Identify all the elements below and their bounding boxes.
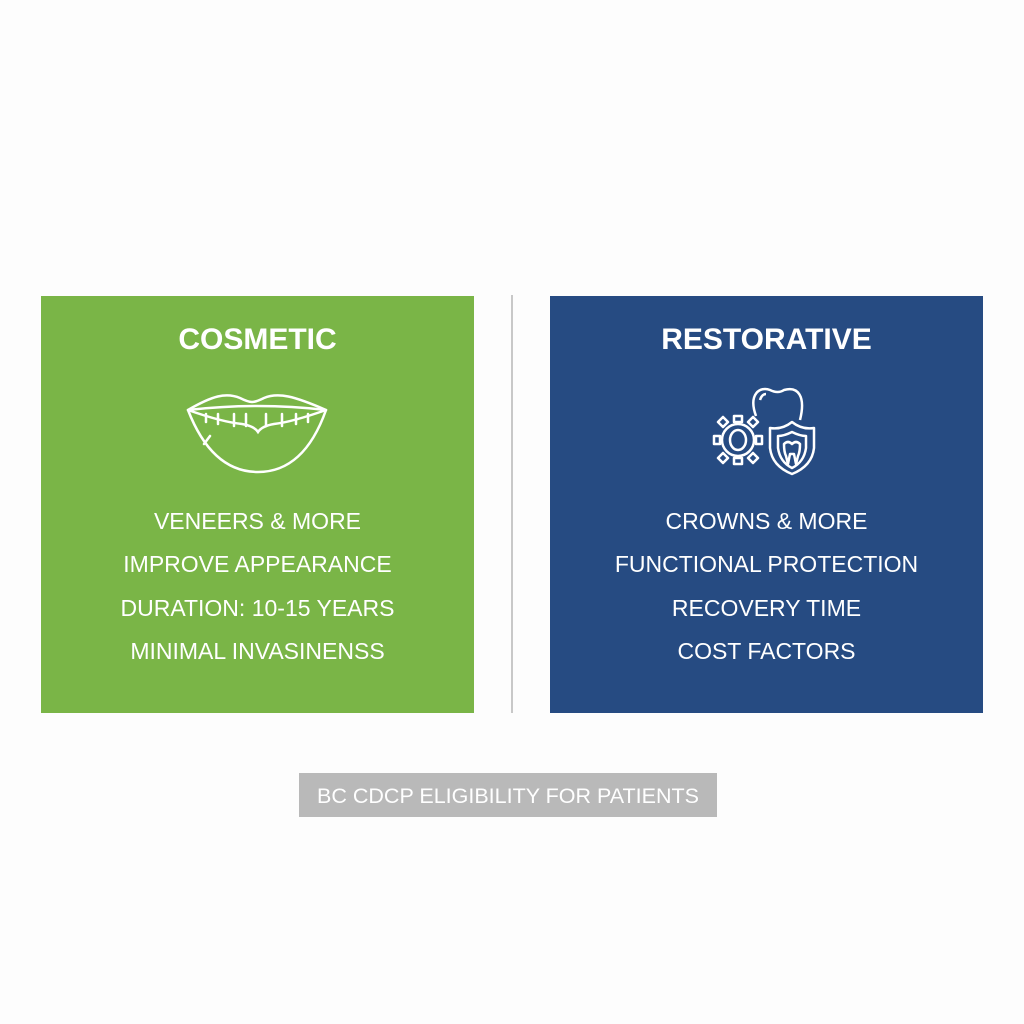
icon: smiling lips <box>186 394 328 474</box>
panel: restorative: COST FACTORS <box>677 638 856 664</box>
text: cosmetic points <box>121 508 394 664</box>
heading: restorative: RESTORATIVE <box>661 323 872 356</box>
panel: restorative <box>550 296 983 713</box>
footer label <box>299 773 717 817</box>
panel: restorative: CROWNS & MORE <box>666 508 867 534</box>
panel: cosmetic: VENEERS & MORE <box>154 508 361 534</box>
panel: cosmetic <box>41 296 474 713</box>
panel: cosmetic: DURATION: 10-15 YEARS <box>121 595 394 621</box>
heading: cosmetic: COSMETIC <box>178 323 337 356</box>
panel: cosmetic: MINIMAL INVASINENSS <box>130 638 385 664</box>
panel: restorative: RECOVERY TIME <box>672 595 861 621</box>
divider <box>511 295 513 713</box>
panel: cosmetic: IMPROVE APPEARANCE <box>123 551 392 577</box>
footer label: BC CDCP ELIGIBILITY FOR PATIENTS <box>317 784 699 808</box>
panel: restorative: FUNCTIONAL PROTECTION <box>615 551 918 577</box>
icon: gear, tooth and shield <box>712 388 816 476</box>
text: restorative points <box>615 508 918 664</box>
